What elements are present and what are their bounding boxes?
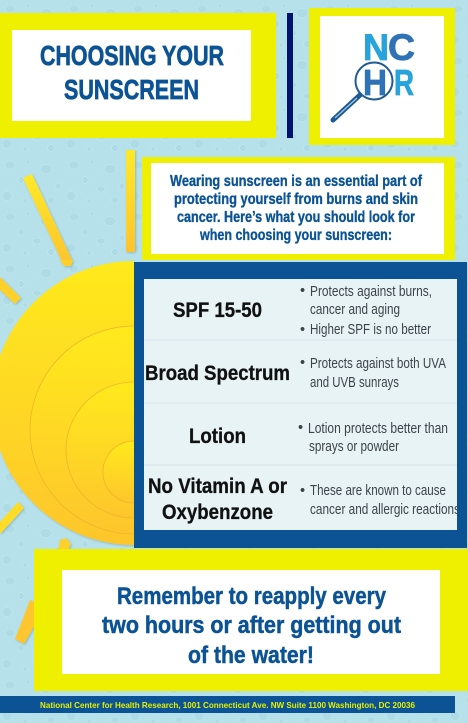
title (40, 40, 224, 105)
row: SPF 15-50 (173, 283, 432, 338)
logo panel (309, 8, 455, 145)
logo: NCHR magnifying glass: C (388, 27, 415, 68)
reminder text: of the water! (188, 642, 314, 669)
intro panel (142, 157, 455, 260)
logo: NCHR magnifying glass (333, 27, 415, 120)
row: SPF 15-50: • (300, 322, 305, 338)
reminder text: two hours or after getting out (102, 612, 401, 639)
title panel (0, 13, 276, 138)
logo: NCHR magnifying glass: H (363, 62, 387, 103)
row: SPF 15-50: cancer and aging (310, 302, 400, 318)
intro text: protecting yourself from burns and skin (174, 191, 418, 208)
footer band (0, 696, 455, 713)
sun rays (0, 150, 135, 644)
intro text: Wearing sunscreen is an essential part of (170, 173, 423, 190)
intro text: cancer. Here’s what you should look for (177, 209, 415, 226)
row: SPF 15-50: • (300, 283, 305, 299)
logo: NCHR magnifying glass: R (394, 62, 414, 103)
intro text (170, 173, 423, 244)
reminder panel (34, 549, 468, 691)
row: Broad Spectrum: Broad Spectrum (145, 362, 290, 385)
sun (0, 261, 134, 547)
row: Broad Spectrum: and UVB sunrays (310, 375, 399, 391)
row: SPF 15-50: SPF 15-50 (173, 299, 262, 322)
reminder text (102, 583, 401, 669)
row: No Vitamin A or Oxybenzone (148, 475, 460, 524)
intro text: when choosing your sunscreen: (199, 227, 392, 244)
title: SUNSCREEN (64, 74, 199, 105)
reminder text: Remember to reapply every (117, 583, 387, 610)
row: Lotion (189, 420, 448, 455)
footer band: National Center for Health Research, 1001 Connecticut Ave. NW Suite 1100 Washington, DC 20036 (40, 700, 415, 710)
row: Broad Spectrum: • (300, 355, 305, 371)
row: No Vitamin A or Oxybenzone: Oxybenzone (162, 501, 273, 524)
navy divider bar (287, 13, 293, 138)
row: Lotion: • (298, 420, 303, 436)
logo: NCHR magnifying glass: N (363, 27, 389, 68)
table panel (134, 262, 467, 548)
row: No Vitamin A or Oxybenzone: • (300, 483, 305, 499)
row: SPF 15-50: Protects against burns, (310, 284, 432, 300)
row: Lotion: Lotion (189, 425, 246, 448)
title: CHOOSING YOUR (40, 40, 224, 71)
row: SPF 15-50: Higher SPF is no better (310, 322, 431, 338)
row: No Vitamin A or Oxybenzone: No Vitamin A or (148, 475, 287, 498)
row: Lotion: sprays or powder (309, 439, 399, 455)
row: Broad Spectrum (145, 355, 446, 391)
